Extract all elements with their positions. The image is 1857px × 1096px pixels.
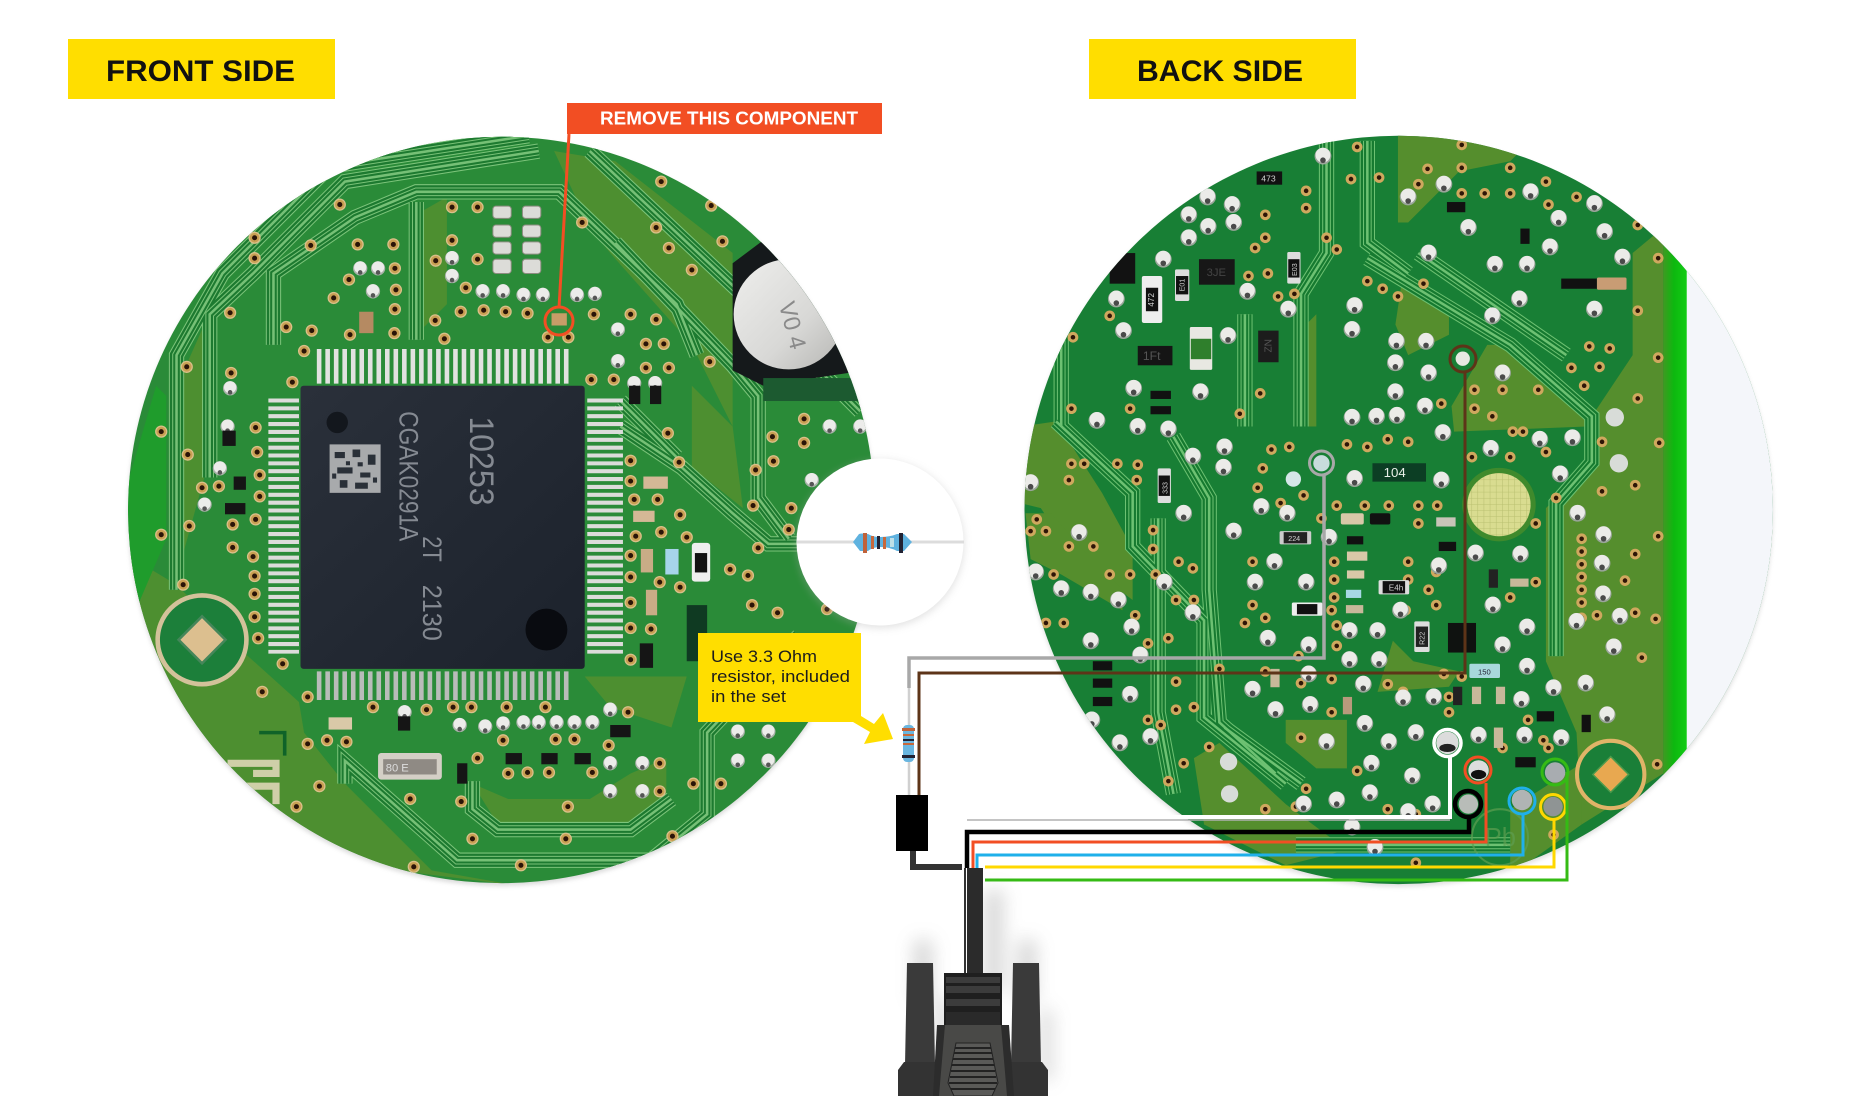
resistor note callout: in the set [711, 687, 786, 706]
data matrix code [330, 444, 381, 493]
microcontroller chip [301, 386, 585, 669]
black and silver components: 1Ft [1143, 349, 1161, 363]
black and silver components [1093, 171, 1627, 767]
resistor pad array [493, 206, 541, 273]
silver solder joints [1031, 155, 1622, 852]
bright left edge [128, 386, 166, 602]
chip marking text [399, 412, 494, 640]
pale substrate at right edge [1686, 270, 1773, 750]
right post [1011, 963, 1041, 1065]
black and silver components: E4h [1389, 583, 1403, 592]
heading: front side [68, 39, 335, 99]
chip pins [284, 366, 605, 686]
solder pads [205, 257, 860, 795]
through-hole vias [1031, 145, 1659, 863]
bright test points [1220, 408, 1628, 803]
mesh test pad [1462, 468, 1536, 541]
round Pb logo [1472, 809, 1528, 865]
hood [933, 1025, 1014, 1096]
chip marking text: CGAK0291A [393, 411, 423, 542]
wire: blue lead [977, 788, 1535, 868]
panel: back side circuit board [1023, 136, 1774, 888]
olive copper planes [1020, 131, 1663, 876]
wire: black lead [967, 791, 1481, 868]
fiducial [1577, 741, 1644, 808]
left post [905, 963, 935, 1065]
chip marking text: 2T [417, 536, 447, 562]
black and silver components: E03 [1291, 263, 1299, 276]
strain relief boot [944, 973, 1002, 1025]
chip marking text: 10253 [462, 416, 500, 506]
black and silver components: R22 [1418, 632, 1426, 645]
resistor note callout: Use 3.3 Ohm [711, 647, 817, 666]
crystal [378, 753, 442, 780]
remove component callout [545, 103, 882, 335]
through-hole vias [161, 182, 827, 867]
icon: resistor [853, 533, 912, 553]
board base [128, 136, 871, 884]
black and silver components: E01 [1179, 279, 1187, 291]
black and silver components: 473 [1261, 174, 1276, 184]
wire: yellow lead [985, 794, 1566, 867]
wire: brown [919, 346, 1476, 795]
small components [222, 312, 710, 784]
black and silver components: 224 [1288, 535, 1300, 543]
black inline module [896, 795, 962, 867]
black and silver components: 104 [1384, 465, 1406, 480]
vent grille [948, 1043, 998, 1096]
fiducial [158, 595, 246, 684]
heading: back side [1089, 39, 1356, 99]
resistor note callout [698, 633, 893, 744]
black and silver components: ZN [1263, 339, 1274, 353]
board base [1024, 136, 1773, 884]
flanges [898, 1062, 935, 1096]
black and silver components: 333 [1161, 482, 1169, 494]
olive copper planes [126, 151, 799, 886]
wire: red lead [973, 757, 1491, 868]
heading: front side: FRONT SIDE [106, 55, 295, 88]
electrolytic capacitor [733, 240, 865, 401]
wire: green lead [985, 759, 1568, 880]
remove component callout: REMOVE THIS COMPONENT [600, 108, 858, 128]
black and silver components: 472 [1147, 293, 1156, 307]
resistor detail circle [796, 458, 964, 628]
wire: white lead [967, 730, 1461, 820]
chip marking text: 2130 [417, 585, 447, 641]
resistor note callout: resistor, included [711, 667, 850, 686]
panel: front side circuit board [126, 136, 872, 888]
electrolytic capacitor: V0 4 [774, 299, 811, 352]
black and silver components: 150 [1478, 667, 1491, 676]
connector: cable and DB9 plug [898, 868, 1052, 1096]
traces [1056, 141, 1592, 845]
heading: back side: BACK SIDE [1137, 55, 1303, 88]
wire: grey to resistor [909, 451, 1334, 795]
icon: inline resistor on wire [902, 725, 915, 762]
bright green board edge [1663, 222, 1687, 784]
traces [177, 136, 865, 860]
silkscreen marks [228, 733, 285, 804]
marked solder points [1313, 352, 1565, 816]
crystal: 80 E [386, 762, 409, 774]
black and silver components: 3JE [1207, 267, 1226, 279]
round Pb logo: Pb [1485, 824, 1516, 852]
